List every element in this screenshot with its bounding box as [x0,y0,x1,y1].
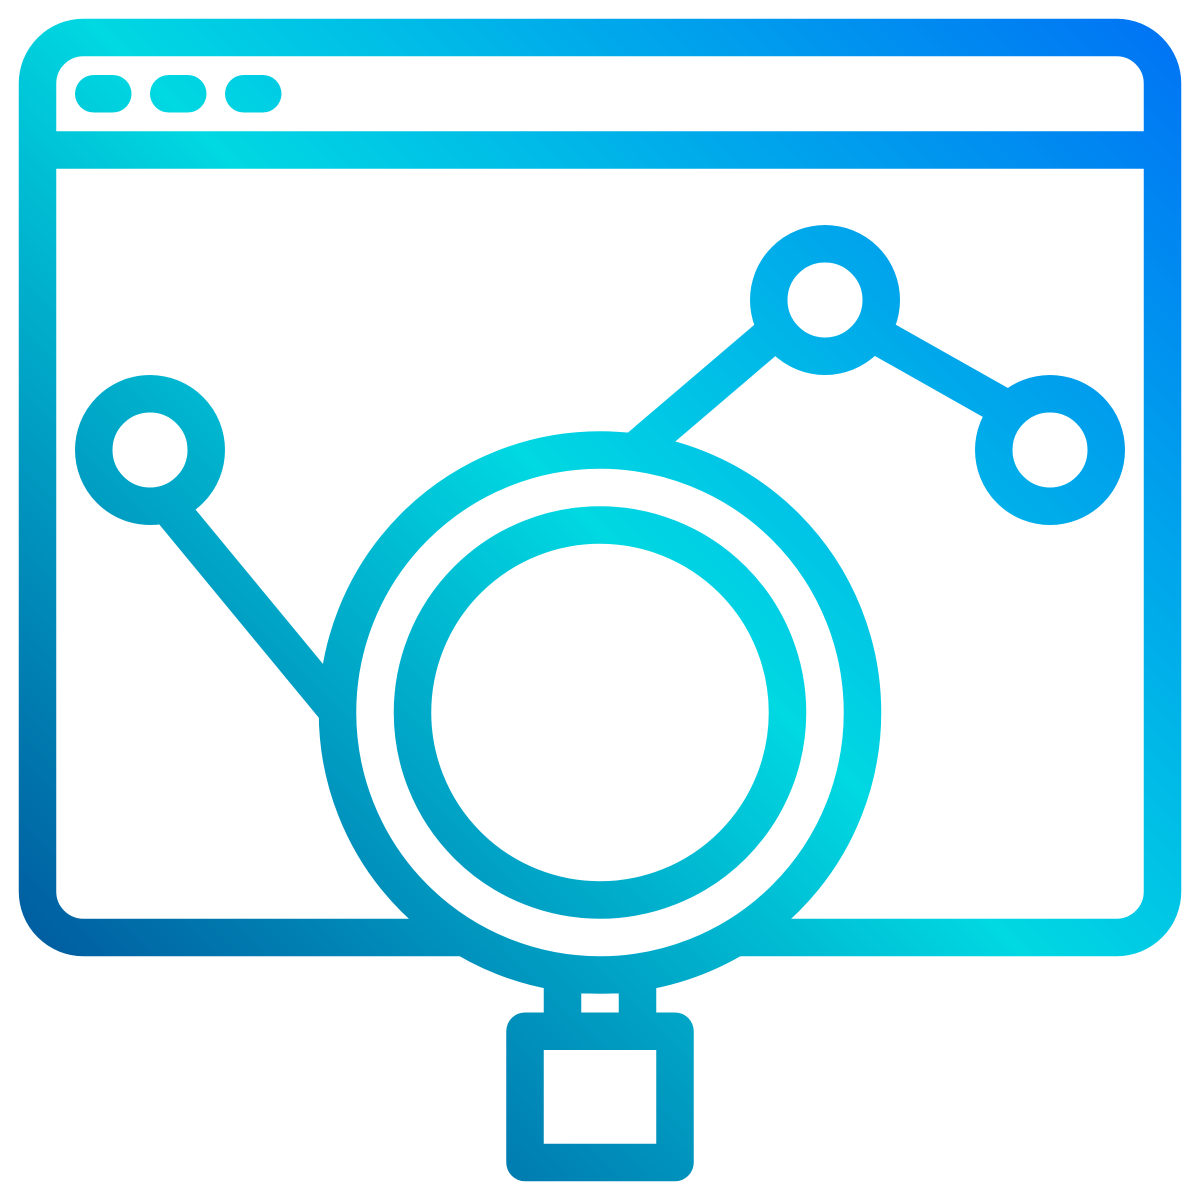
magnifier handle [525,1031,675,1162]
browser window [38,38,1162,938]
lens inner ring [412,525,788,900]
lens outer ring [338,450,862,975]
magnifier [338,450,862,1162]
magnifier neck [544,970,656,1020]
chart nodes [94,244,1106,506]
title bar divider [38,131,1162,169]
window control dots [75,75,282,112]
window frame [38,38,1162,938]
chart connector lines [165,319,1030,714]
